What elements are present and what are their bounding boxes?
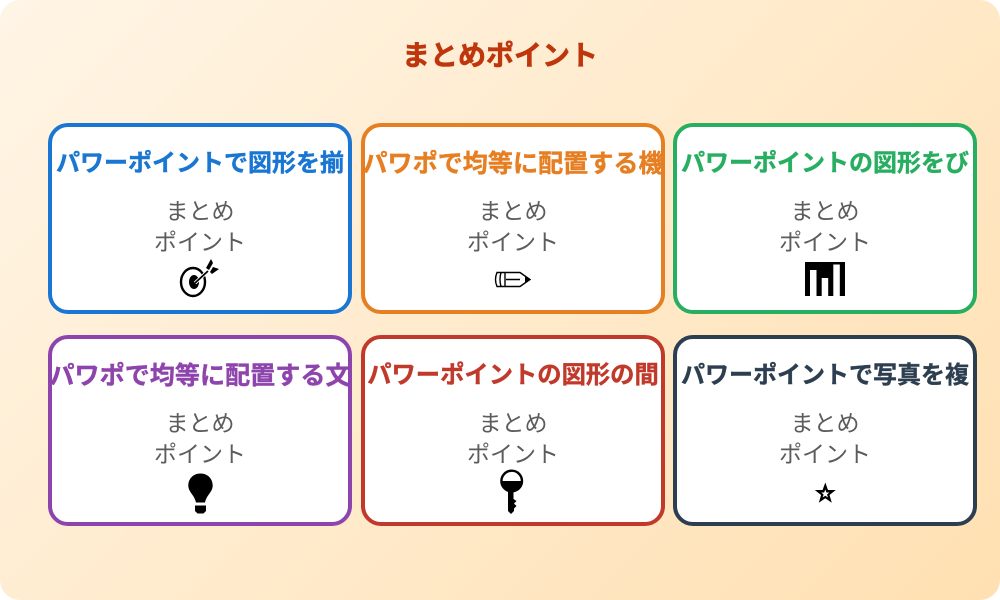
panel: card 1 [48, 123, 352, 314]
card 2 text: まとめ [478, 198, 548, 224]
icon: key [500, 470, 524, 514]
card 4 text [154, 410, 246, 467]
card 3 heading: パワーポイントの図形をび [681, 150, 969, 177]
card 5 text: まとめ [478, 410, 548, 436]
panel: card 4 [48, 335, 352, 526]
card 6 text: まとめ [790, 410, 860, 436]
card 2 heading: パワポで均等に配置する機 [362, 150, 664, 178]
card 4 text: ポイント [154, 441, 246, 467]
card 4 text: まとめ [166, 410, 234, 436]
panel: card 3 [673, 123, 977, 314]
card 2 text [467, 198, 559, 255]
panel: card 5 [361, 335, 665, 526]
card 1 heading: パワーポイントで図形を揃 [56, 150, 344, 177]
card 5 text: ポイント [467, 441, 559, 467]
card 1 text: ポイント [154, 229, 246, 255]
icon: target with arrow [180, 259, 219, 298]
icon: bar chart [805, 262, 845, 296]
icon: light bulb [188, 474, 213, 514]
card 4 heading: パワポで均等に配置する文 [49, 362, 351, 390]
card 1 text: まとめ [166, 198, 234, 224]
card 3 text: ポイント [779, 229, 871, 255]
card 2 text: ポイント [467, 229, 559, 255]
card 6 text: ポイント [779, 441, 871, 467]
card 3 text: まとめ [790, 198, 860, 224]
card 6 text [779, 410, 871, 467]
icon: star [814, 482, 836, 503]
card 5 text [467, 410, 559, 467]
title: まとめポイント [402, 40, 598, 71]
panel: card 6 [673, 335, 977, 526]
panel: card 2 [361, 123, 665, 314]
card 1 text [154, 198, 246, 255]
icon: pencil [494, 272, 532, 288]
card 6 heading: パワーポイントで写真を複 [681, 362, 969, 389]
card 3 text [779, 198, 871, 255]
card 5 heading: パワーポイントの図形の間 [367, 362, 659, 389]
